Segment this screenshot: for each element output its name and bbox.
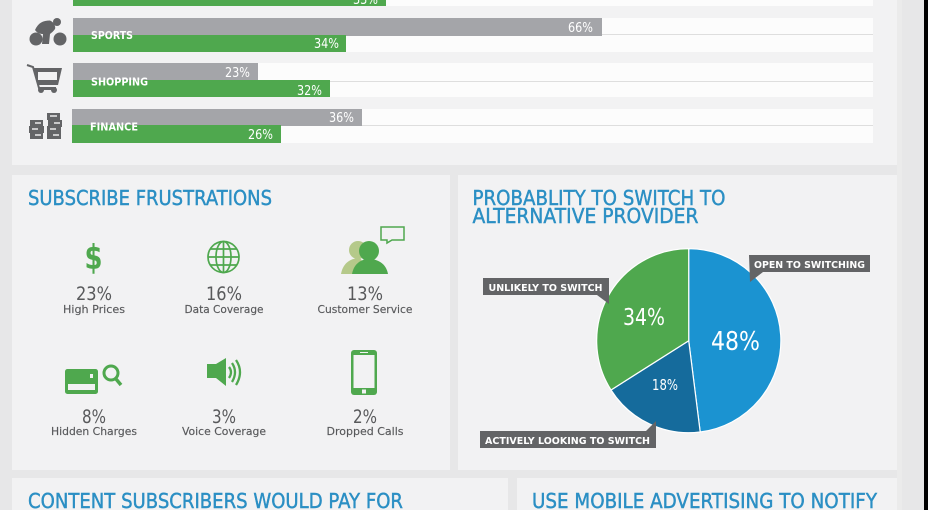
pie value labels: 48% (711, 327, 760, 357)
finance bars (72, 109, 873, 143)
icon: finance cash stacks (29, 113, 62, 139)
heading: subscribe frustrations: SUBSCRIBE FRUSTRATIONS (28, 186, 272, 210)
panel: usage bar chart (12, 0, 897, 165)
item: customer service: Customer Service (318, 304, 412, 316)
callout: unlikely to switch (483, 278, 609, 304)
item: high prices (63, 238, 125, 316)
item: voice coverage (182, 358, 266, 438)
panel: mobile advertising (517, 478, 897, 510)
panel: content subscribers would pay for (12, 478, 508, 510)
item: voice coverage: 3% (212, 407, 236, 428)
icon: shopping cart (27, 65, 62, 93)
icon: sports cyclist (30, 18, 66, 46)
item: voice coverage: Voice Coverage (182, 426, 266, 438)
item: high prices: $ (84, 238, 102, 278)
item: high prices: High Prices (63, 304, 125, 316)
item: dropped calls: Dropped Calls (326, 426, 404, 438)
pie value labels: 18% (652, 376, 678, 394)
shopping bars (73, 63, 873, 99)
callout: open to switching (749, 255, 870, 282)
item: hidden charges: Hidden Charges (51, 426, 137, 438)
shopping bars: SHOPPING (91, 76, 148, 88)
panel: probability to switch: ALTERNATIVE PROVIDER (472, 204, 699, 228)
finance bars: FINANCE (90, 122, 138, 134)
callout: open to switching: OPEN TO SWITCHING (754, 260, 865, 271)
sports bars: SPORTS (91, 30, 133, 42)
item: customer service (318, 227, 412, 316)
finance bars: 36% (329, 111, 354, 126)
top row bars (73, 0, 873, 8)
item: data coverage (184, 242, 264, 316)
item: dropped calls (326, 350, 404, 438)
callout: actively looking to switch: ACTIVELY LOOKING TO SWITCH (485, 436, 650, 447)
panel: subscribe frustrations (12, 175, 450, 470)
panel: probability to switch (458, 175, 897, 470)
heading: probability to switch: PROBABLITY TO SWITCH TO (472, 186, 726, 210)
pie value labels (623, 305, 760, 394)
pie chart (597, 249, 781, 433)
finance bars: 26% (248, 128, 273, 143)
sports bars: 66% (568, 21, 593, 36)
item: customer service: 13% (347, 284, 383, 305)
item: dropped calls: 2% (353, 407, 377, 428)
sports bars (73, 18, 873, 52)
item: data coverage: Data Coverage (184, 304, 264, 316)
pie value labels: 34% (623, 305, 665, 331)
callout: actively looking to switch (480, 421, 656, 448)
item: data coverage: 16% (206, 284, 242, 305)
sports bars: 34% (314, 37, 339, 52)
item: hidden charges (51, 366, 137, 438)
callout: unlikely to switch: UNLIKELY TO SWITCH (488, 283, 602, 294)
item: hidden charges: 8% (82, 407, 106, 428)
shopping bars: 23% (225, 66, 250, 81)
shopping bars: 32% (297, 84, 322, 99)
item: high prices: 23% (76, 284, 112, 305)
